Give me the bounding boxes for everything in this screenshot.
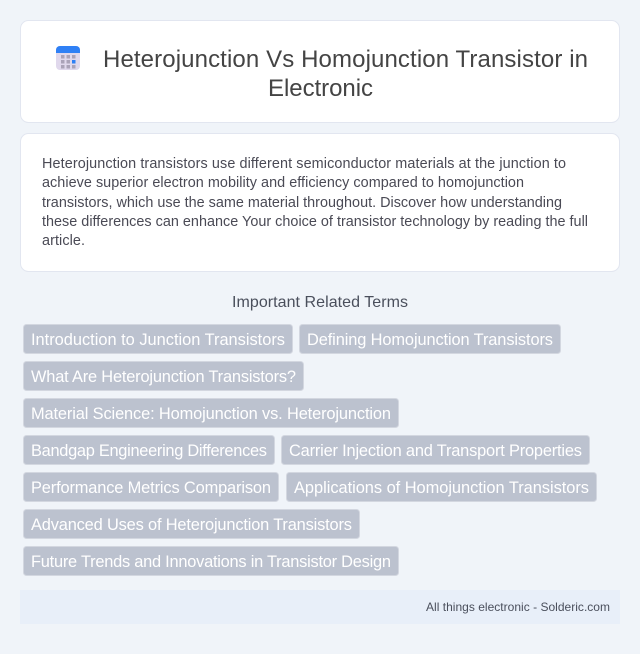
tag: material science [24, 398, 398, 428]
title: Heterojunction Vs Homojunction Transistor in [103, 46, 588, 73]
footer credit: All things electronic - Solderic.com [426, 600, 610, 614]
text block: summary paragraph: these differences can enhance Your choice of transistor technology by reading the full [42, 214, 588, 230]
panel: introduction text [20, 134, 620, 272]
tag: performance metrics: Performance Metrics Comparison [31, 479, 271, 497]
tag: what are heterojunction: What Are Heterojunction Transistors? [31, 368, 296, 386]
tag: performance metrics [24, 472, 278, 502]
tag: what are heterojunction [24, 362, 304, 390]
panel: title card [20, 20, 620, 122]
tag: material science: Material Science: Homojunction vs. Heterojunction [31, 405, 391, 423]
icon: calendar grid [56, 46, 80, 70]
title [103, 46, 588, 102]
tag: future trends: Future Trends and Innovations in Transistor Design [31, 553, 391, 571]
text block: summary paragraph: transistors, which use the same material throughout. Discover how understanding [42, 195, 562, 211]
tag: advanced uses: Advanced Uses of Heterojunction Transistors [31, 516, 352, 534]
text block: summary paragraph: Heterojunction transistors use different semiconductor materials at the junction to [42, 156, 566, 172]
title: Electronic [268, 75, 373, 102]
text block: summary paragraph: achieve superior electron mobility and efficiency compared to homojunction [42, 175, 524, 191]
tag: applications: Applications of Homojunction Transistors [294, 479, 589, 497]
tag: bandgap engineering [24, 436, 274, 464]
footer [20, 590, 620, 624]
tag: carrier injection [282, 436, 590, 464]
tag: future trends [24, 546, 398, 576]
heading: important related terms: Important Related Terms [232, 294, 408, 311]
tag: bandgap engineering: Bandgap Engineering Differences [31, 442, 267, 460]
text block: summary paragraph [42, 156, 588, 249]
tag: defining homojunction [300, 324, 560, 354]
tag: carrier injection: Carrier Injection and Transport Properties [289, 442, 582, 460]
tag: introduction [24, 324, 292, 354]
tag: defining homojunction: Defining Homojunction Transistors [307, 331, 553, 349]
tag: applications [286, 472, 596, 502]
tag: advanced uses [24, 510, 360, 538]
tag list [24, 324, 596, 576]
text block: summary paragraph: article. [42, 233, 85, 249]
tag: introduction: Introduction to Junction Transistors [31, 331, 285, 349]
